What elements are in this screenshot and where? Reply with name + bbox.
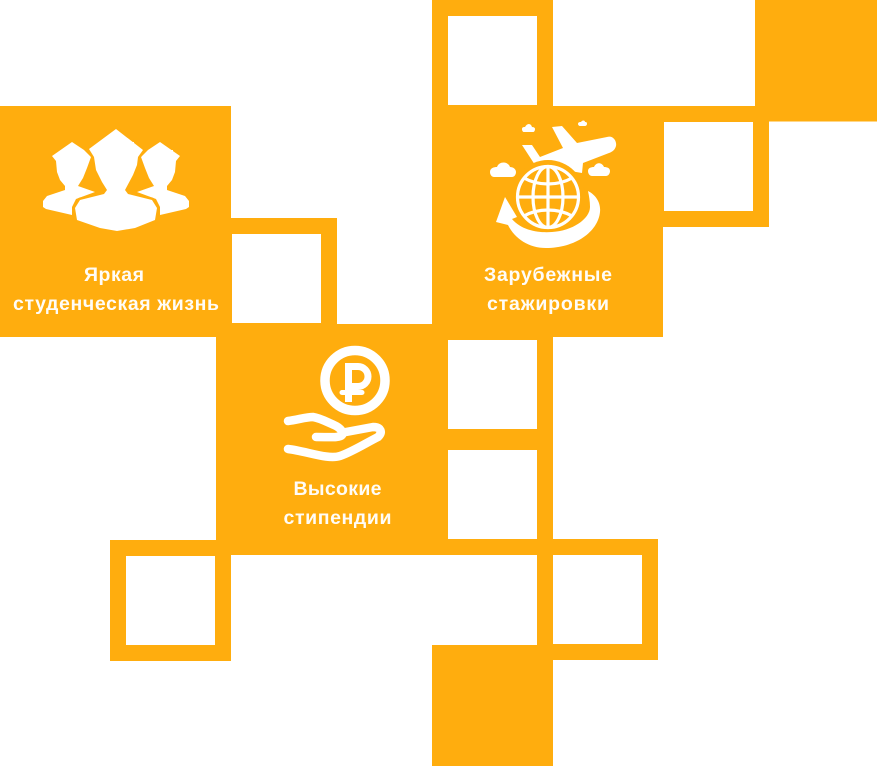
text: student life label: Яркая	[84, 264, 144, 286]
text: internships label	[484, 264, 612, 315]
icon: globe	[518, 166, 579, 228]
panel: bottom left outlined square	[110, 540, 231, 661]
panel: high scholarships	[216, 324, 447, 555]
icon: ruble coin	[325, 350, 385, 410]
text: internships label: Зарубежные	[484, 264, 612, 286]
panel: lower right outlined square	[537, 539, 658, 660]
text: scholarships label: стипендии	[284, 507, 392, 529]
text: student life label	[13, 264, 219, 315]
icon: open hand	[288, 417, 381, 457]
text: internships label: стажировки	[487, 293, 609, 315]
panel: internships abroad	[432, 106, 663, 337]
text: student life label: студенческая жизнь	[13, 293, 219, 315]
icon: plane and globe	[490, 120, 616, 248]
panel: lower middle outlined square	[432, 434, 553, 555]
icon: graduates	[43, 129, 189, 231]
panel: bottom filled square	[432, 645, 553, 766]
icon: plane	[522, 126, 616, 173]
panel: student life	[0, 106, 231, 337]
panel: top outlined square	[432, 0, 553, 106]
text: scholarships label	[284, 478, 392, 529]
panel: right outlined square	[648, 106, 769, 227]
icon: circular arrow	[496, 191, 600, 248]
text: scholarships label: Высокие	[294, 478, 382, 500]
icon: globe gap	[511, 160, 585, 234]
panel: top right filled square	[755, 0, 877, 122]
panel: middle outlined square	[432, 324, 553, 445]
panel: outlined square beside student life	[216, 218, 337, 339]
icon: clouds	[490, 120, 610, 177]
